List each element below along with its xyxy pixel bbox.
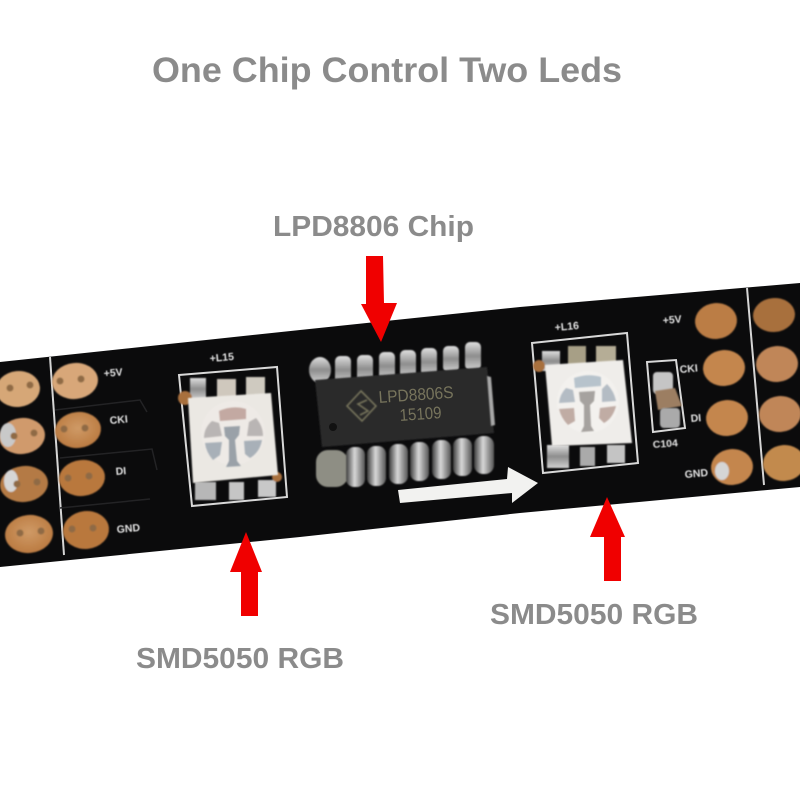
title: One Chip Control Two Leds bbox=[152, 51, 622, 90]
silkscreen labels: right: +L16 bbox=[554, 320, 580, 334]
trace outlines bbox=[55, 400, 157, 508]
contact pads: right bbox=[694, 296, 800, 487]
outline bbox=[532, 333, 638, 473]
chip: LPD8806S: 15109 bbox=[399, 403, 442, 425]
arrow: to right LED bbox=[590, 497, 625, 581]
die pattern bbox=[204, 407, 263, 467]
chip marking: LPD8806S bbox=[378, 383, 454, 407]
arrow: to left LED bbox=[230, 532, 262, 616]
package bbox=[188, 393, 278, 483]
silkscreen labels: left: DI bbox=[115, 465, 127, 478]
silkscreen labels: right: GND bbox=[684, 467, 709, 481]
label: right LED: SMD5050 RGB bbox=[490, 599, 698, 631]
chip body bbox=[315, 367, 494, 447]
silkscreen labels: right: DI bbox=[690, 412, 702, 425]
chip pins top bbox=[309, 342, 481, 384]
strip body bbox=[0, 283, 800, 567]
white direction arrow bbox=[398, 467, 538, 503]
contact pads: left bbox=[0, 361, 111, 555]
silkscreen labels: right: +5V bbox=[662, 313, 682, 327]
label: left LED: SMD5050 RGB bbox=[136, 643, 344, 675]
chip: LPD8806S bbox=[309, 342, 495, 487]
silkscreen labels: right bbox=[554, 313, 709, 481]
capacitor C104: C104 bbox=[652, 437, 678, 451]
arrow: to chip bbox=[361, 256, 397, 342]
silkscreen dividers bbox=[50, 288, 764, 555]
heading: chip label: LPD8806 Chip bbox=[273, 211, 474, 243]
solder legs bbox=[178, 377, 282, 500]
solder legs bbox=[533, 346, 625, 468]
LED strip bbox=[0, 283, 800, 567]
silkscreen labels: left: +L15 bbox=[209, 351, 235, 365]
die pattern bbox=[559, 375, 616, 432]
package bbox=[545, 360, 632, 446]
silkscreen labels: left bbox=[103, 351, 235, 536]
capacitor C104 bbox=[647, 360, 685, 451]
LED: right SMD5050 bbox=[532, 333, 638, 473]
silkscreen labels: left: GND bbox=[116, 522, 141, 536]
chip logo bbox=[347, 391, 376, 421]
silkscreen labels: left: CKI bbox=[109, 413, 128, 427]
outline bbox=[179, 367, 287, 506]
chip pins bottom bbox=[316, 436, 494, 487]
silkscreen labels: left: +5V bbox=[103, 366, 123, 380]
LED: left SMD5050 bbox=[178, 367, 287, 506]
silkscreen labels: right: CKI bbox=[679, 362, 698, 376]
